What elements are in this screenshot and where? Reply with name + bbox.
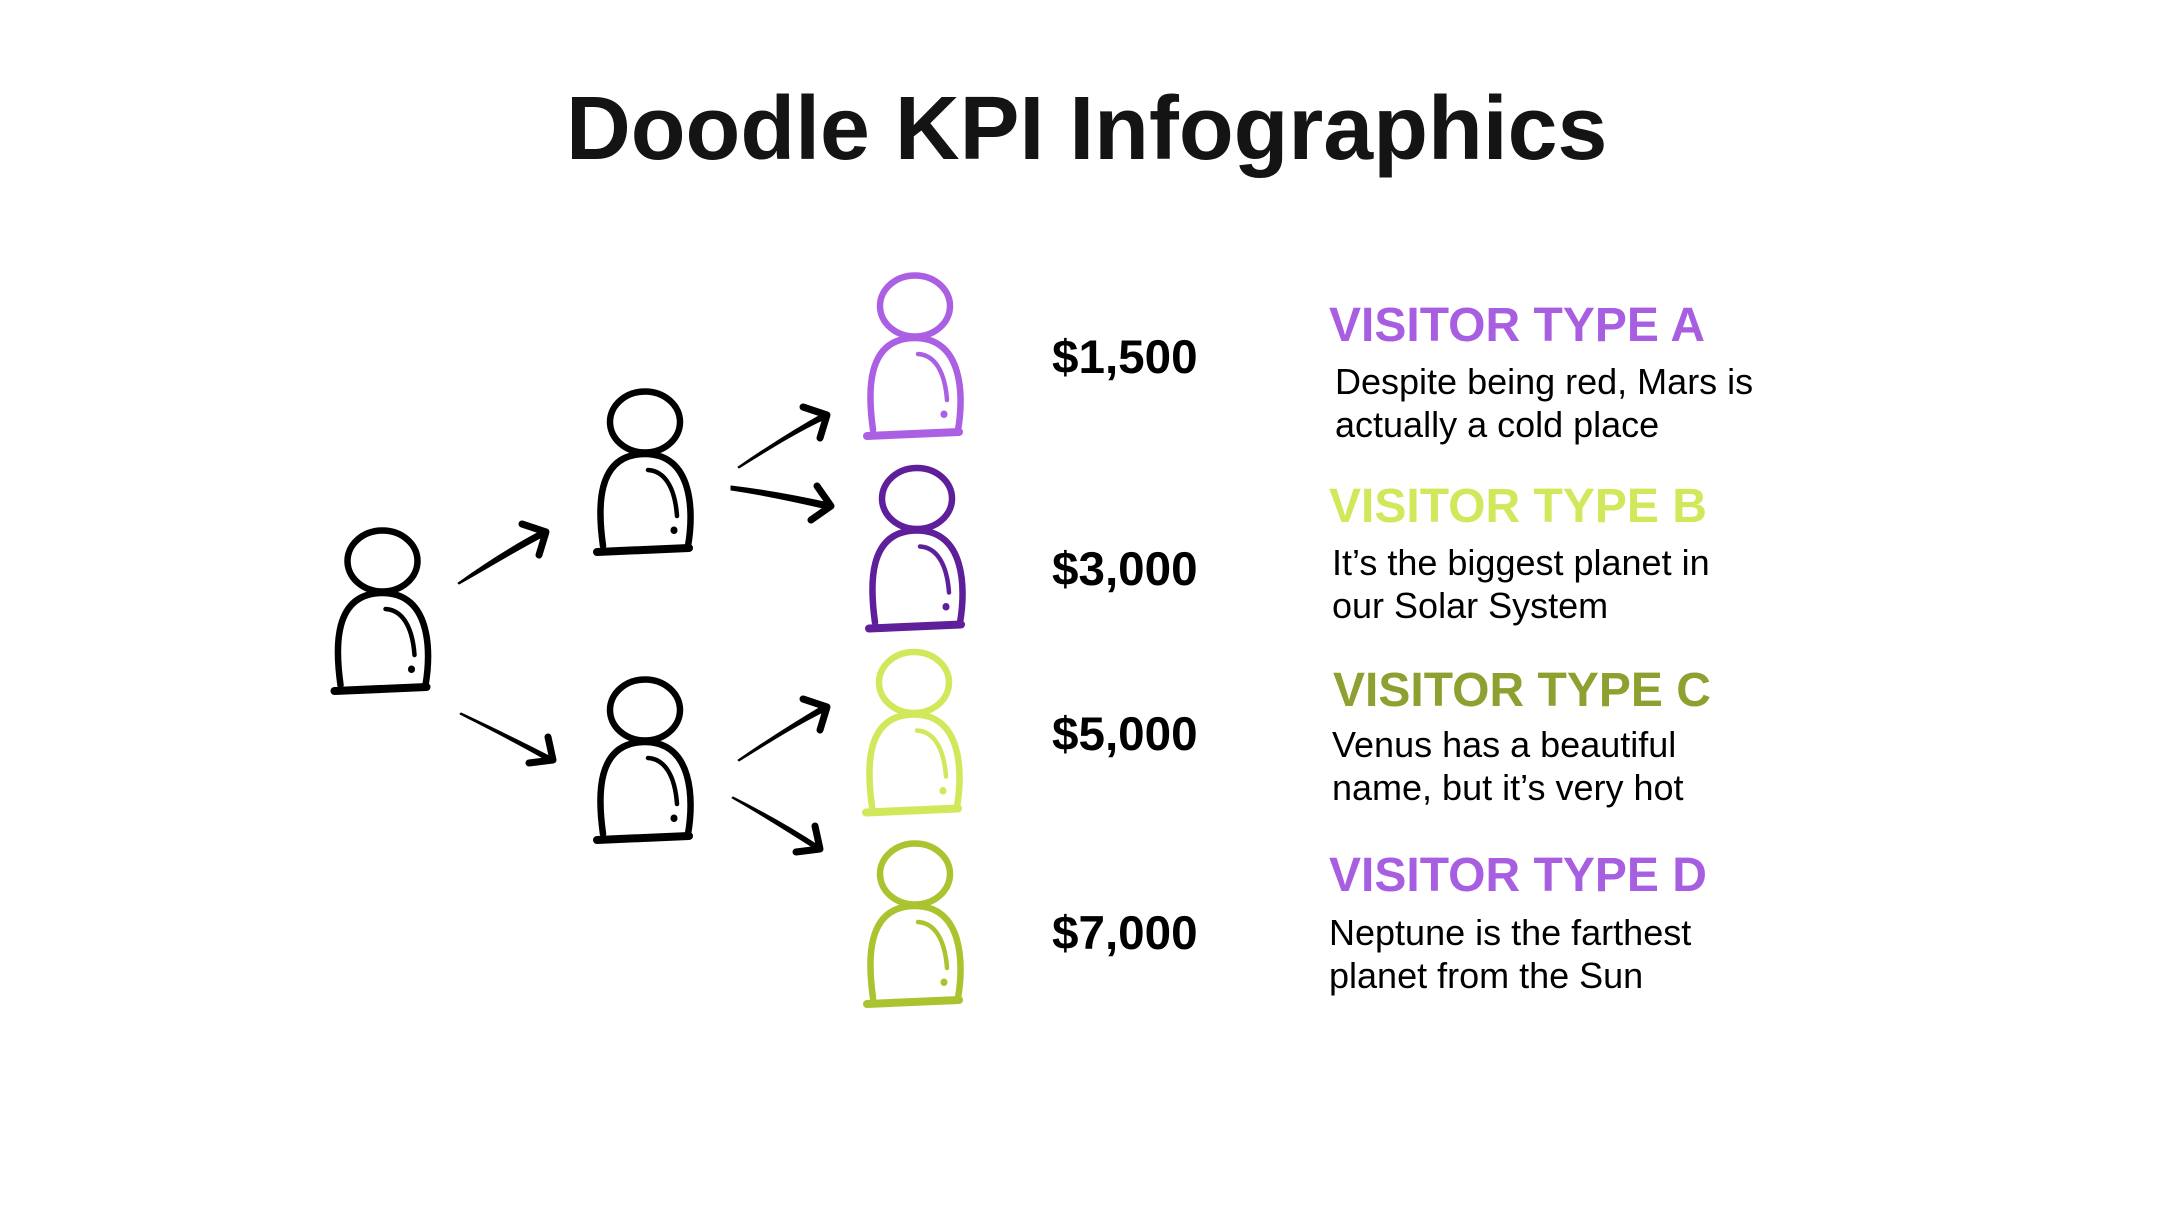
icon: visitor C person (866, 652, 960, 812)
arrow: lower middle to visitor C (738, 699, 827, 761)
heading: visitor type D: VISITOR TYPE D (1329, 849, 1707, 902)
heading: visitor type B: VISITOR TYPE B (1329, 480, 1707, 533)
icon: visitor D person (867, 844, 961, 1004)
text: visitor type A description: Despite being red, Mars is (1335, 361, 1753, 402)
icon: root person (334, 530, 428, 691)
text: visitor type A description: actually a cold place (1335, 404, 1659, 445)
value: visitor C: $5,000 (1052, 708, 1198, 761)
text: visitor type B description: our Solar System (1332, 585, 1608, 626)
icon: visitor A person (867, 276, 961, 436)
heading: visitor type C: VISITOR TYPE C (1333, 664, 1711, 717)
arrow: lower middle to visitor D (732, 797, 820, 852)
arrow: upper middle to visitor B (731, 486, 831, 520)
value: visitor B: $3,000 (1052, 543, 1198, 596)
text: visitor type C description: Venus has a beautiful (1332, 724, 1676, 765)
icon: lower middle person (597, 680, 691, 840)
icon: visitor B person (869, 468, 963, 628)
arrow: upper middle to visitor A (738, 407, 827, 468)
text: visitor type B description: It’s the biggest planet in (1332, 542, 1710, 583)
text: visitor type C description: name, but it’s very hot (1332, 767, 1684, 808)
arrow: root to upper middle (458, 524, 546, 584)
heading: visitor type A: VISITOR TYPE A (1329, 299, 1705, 352)
value: visitor D: $7,000 (1052, 907, 1198, 960)
text: visitor type D description: Neptune is the farthest (1329, 912, 1691, 953)
arrow: root to lower middle (460, 713, 553, 763)
text: visitor type D description: planet from the Sun (1329, 955, 1643, 996)
value: visitor A: $1,500 (1052, 331, 1198, 384)
title: Doodle KPI Infographics (566, 79, 1607, 179)
icon: upper middle person (597, 392, 691, 552)
